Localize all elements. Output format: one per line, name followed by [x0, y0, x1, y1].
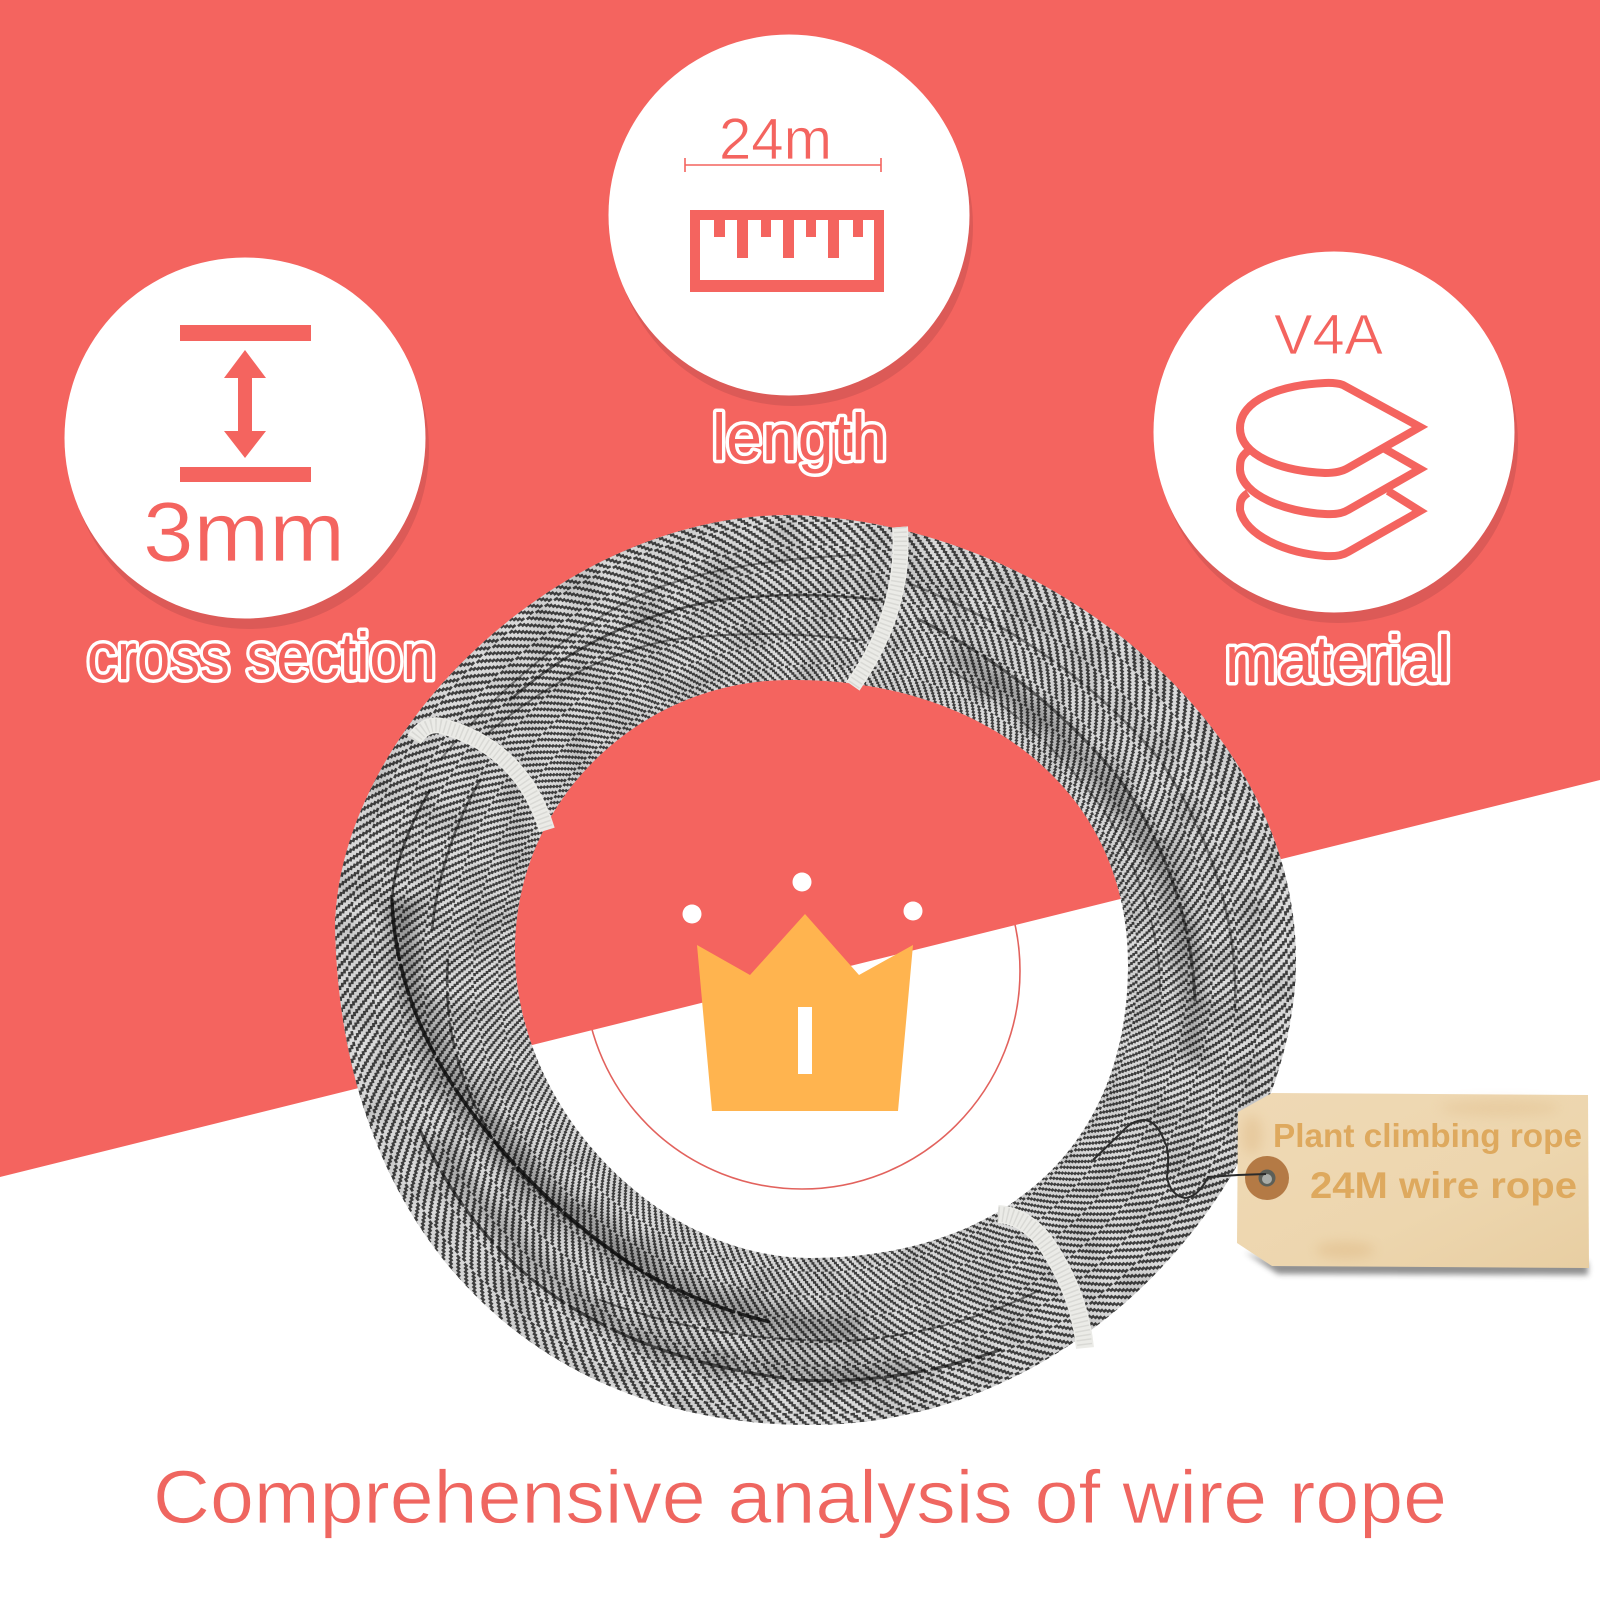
price tag: [1237, 1093, 1589, 1275]
icon: stacked layers: [1240, 383, 1420, 556]
cable tie: left: [414, 725, 547, 830]
heading: length: length: [712, 400, 887, 474]
value: 24m: 24m: [719, 107, 832, 172]
panel: cross section badge: [64, 258, 429, 629]
tag paper: [1237, 1093, 1589, 1268]
icon: ruler: [690, 210, 884, 292]
cable tie: bottom right: [998, 1214, 1085, 1348]
heading: material: material: [1225, 622, 1451, 696]
crown icon: [682, 872, 922, 1111]
title: Comprehensive analysis of wire rope: [153, 1455, 1447, 1539]
value: V4A: V4A: [1274, 303, 1383, 367]
eyelet: [1245, 1156, 1289, 1200]
cable tie: top: [853, 527, 901, 686]
tag text: Plant climbing rope: [1273, 1117, 1582, 1154]
panel: length badge: [608, 34, 973, 406]
tag shadow: [1245, 1252, 1588, 1275]
dark gaps between coils: [392, 555, 1235, 1381]
soft dark bands between coils: [400, 650, 1192, 1374]
dimension line: [685, 158, 881, 172]
panel: material badge: [1154, 252, 1518, 623]
heading: cross section: cross section: [87, 619, 436, 693]
mottled shading: [320, 500, 1320, 1440]
red diagonal background panel: [0, 0, 1600, 1177]
tag wire: [1093, 1120, 1266, 1198]
price tag: 24M wire rope: [1310, 1165, 1577, 1206]
wire rope coil: [320, 499, 1320, 1440]
value: 3mm: 3mm: [143, 485, 345, 579]
icon: diameter arrows: [180, 325, 311, 482]
thin circle behind crown: [584, 753, 1020, 1189]
